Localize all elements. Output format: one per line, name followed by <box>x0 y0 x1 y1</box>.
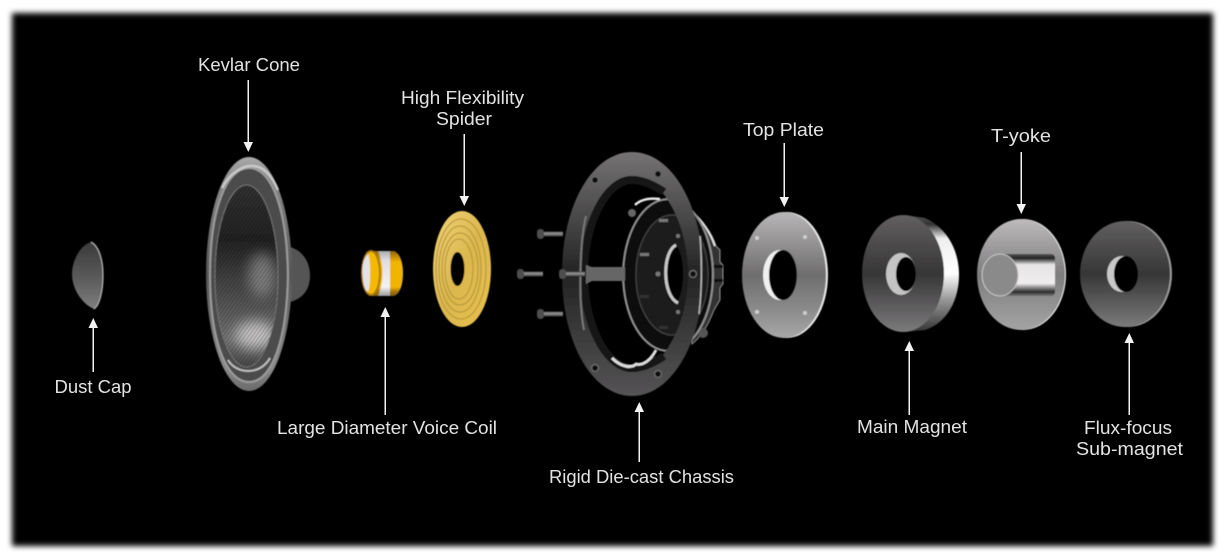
label: Main Magnet: Main Magnet <box>857 417 967 437</box>
label: Dust Cap: Dust Cap <box>54 377 132 397</box>
arrow: spider <box>460 134 469 206</box>
label: T-yoke: T-yoke <box>991 126 1051 146</box>
part: t-yoke <box>977 219 1066 330</box>
arrow: t-yoke <box>1016 152 1026 214</box>
arrow: chassis <box>634 402 644 462</box>
arrow: top plate <box>780 143 789 207</box>
arrow: voice coil <box>380 307 390 415</box>
label: Large Diameter Voice Coil: Large Diameter Voice Coil <box>277 418 497 438</box>
chassis mounting holes <box>592 170 696 378</box>
part: dust cap <box>72 242 103 309</box>
part: kevlar cone <box>206 157 310 391</box>
part: screws <box>517 229 585 319</box>
arrow: dust cap <box>88 318 98 372</box>
label: Flux-focus Sub-magnet: Flux-focus <box>1084 418 1172 438</box>
chassis crossbar <box>586 265 625 284</box>
label: High Flexibility Spider: Spider <box>436 109 492 129</box>
part: spider <box>433 211 491 327</box>
part: voice coil <box>362 251 403 296</box>
label: Kevlar Cone: Kevlar Cone <box>198 55 300 75</box>
part: top plate <box>742 212 828 338</box>
label: High Flexibility Spider <box>401 88 524 129</box>
arrow: main magnet <box>904 341 914 415</box>
chassis motor mount <box>623 199 713 351</box>
part: chassis <box>562 152 723 396</box>
label: Flux-focus Sub-magnet <box>1076 418 1183 459</box>
label: High Flexibility Spider: High Flexibility <box>401 88 524 108</box>
label: Top Plate: Top Plate <box>743 120 824 140</box>
part: flux-focus sub-magnet <box>1080 221 1172 327</box>
part: main magnet <box>862 215 959 332</box>
label: Flux-focus Sub-magnet: Sub-magnet <box>1076 439 1183 459</box>
chassis inner lip <box>584 180 664 368</box>
chassis rear housing <box>628 209 723 344</box>
arrow: sub-magnet <box>1124 333 1134 415</box>
label: Rigid Die-cast Chassis: Rigid Die-cast Chassis <box>549 467 734 487</box>
chassis flange ring <box>562 152 703 396</box>
arrow: kevlar cone <box>244 80 253 152</box>
